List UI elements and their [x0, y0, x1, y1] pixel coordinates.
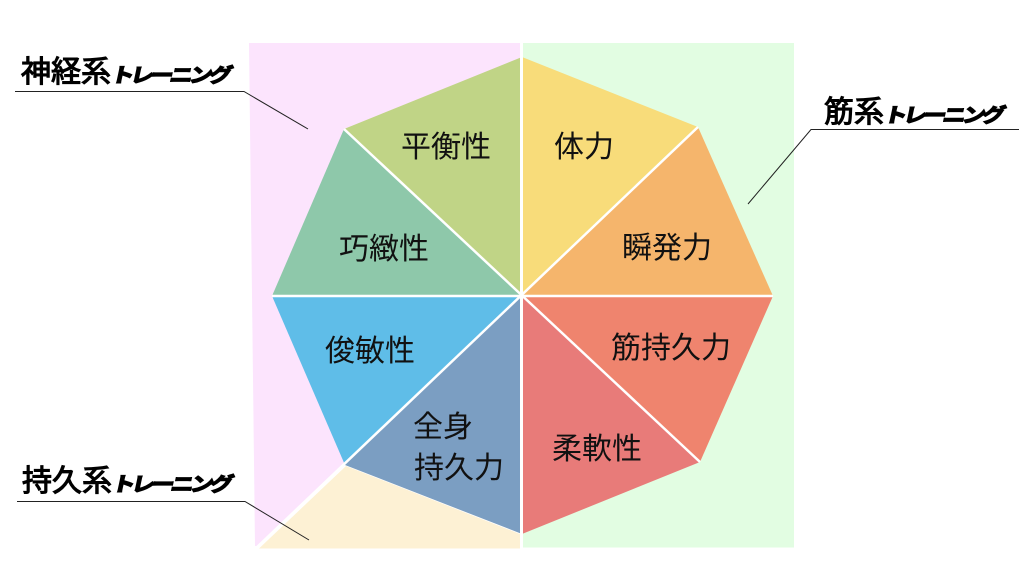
segment: 柔軟性 — [522, 296, 700, 534]
callout: 神経系トレーニング: トレーニング — [109, 64, 235, 87]
callout: 持久系トレーニング — [17, 465, 309, 540]
segment: 俊敏性 — [272, 296, 522, 465]
callout: 神経系トレーニング — [15, 56, 308, 129]
label: 巧緻性: 巧緻性 — [339, 233, 429, 266]
callout: 持久系トレーニング: トレーニング — [110, 473, 236, 496]
segment: 全身持久力 — [345, 296, 522, 534]
segment: 体力 — [522, 57, 698, 296]
label: 筋持久力: 筋持久力 — [611, 332, 731, 365]
panel: pink neural background — [249, 43, 520, 546]
chart: octagon of physical abilities — [255, 43, 773, 549]
label: 全身持久力: 全身 — [413, 411, 473, 444]
segment dividers — [255, 43, 773, 549]
segment: 巧緻性 — [272, 129, 522, 296]
label: 体力: 体力 — [554, 131, 614, 164]
label: 全身持久力: 持久力 — [414, 452, 504, 485]
panel: cream endurance background — [259, 466, 520, 548]
label: 俊敏性: 俊敏性 — [325, 335, 415, 368]
callout: 筋系トレーニング — [748, 96, 1019, 204]
callout: 持久系トレーニング: 持久系 — [22, 465, 112, 498]
label: 柔軟性: 柔軟性 — [552, 433, 642, 466]
segment: 筋持久力 — [522, 296, 773, 462]
label: 平衡性: 平衡性 — [401, 131, 491, 164]
callout: 筋系トレーニング: トレーニング — [882, 104, 1008, 127]
segment: 瞬発力 — [522, 127, 773, 296]
callout: 神経系トレーニング: 神経系 — [21, 56, 111, 89]
panel: green muscle background — [523, 43, 794, 548]
callout: 筋系トレーニング: 筋系 — [824, 96, 884, 129]
label: 瞬発力: 瞬発力 — [622, 232, 712, 265]
segment: 平衡性 — [344, 57, 522, 296]
